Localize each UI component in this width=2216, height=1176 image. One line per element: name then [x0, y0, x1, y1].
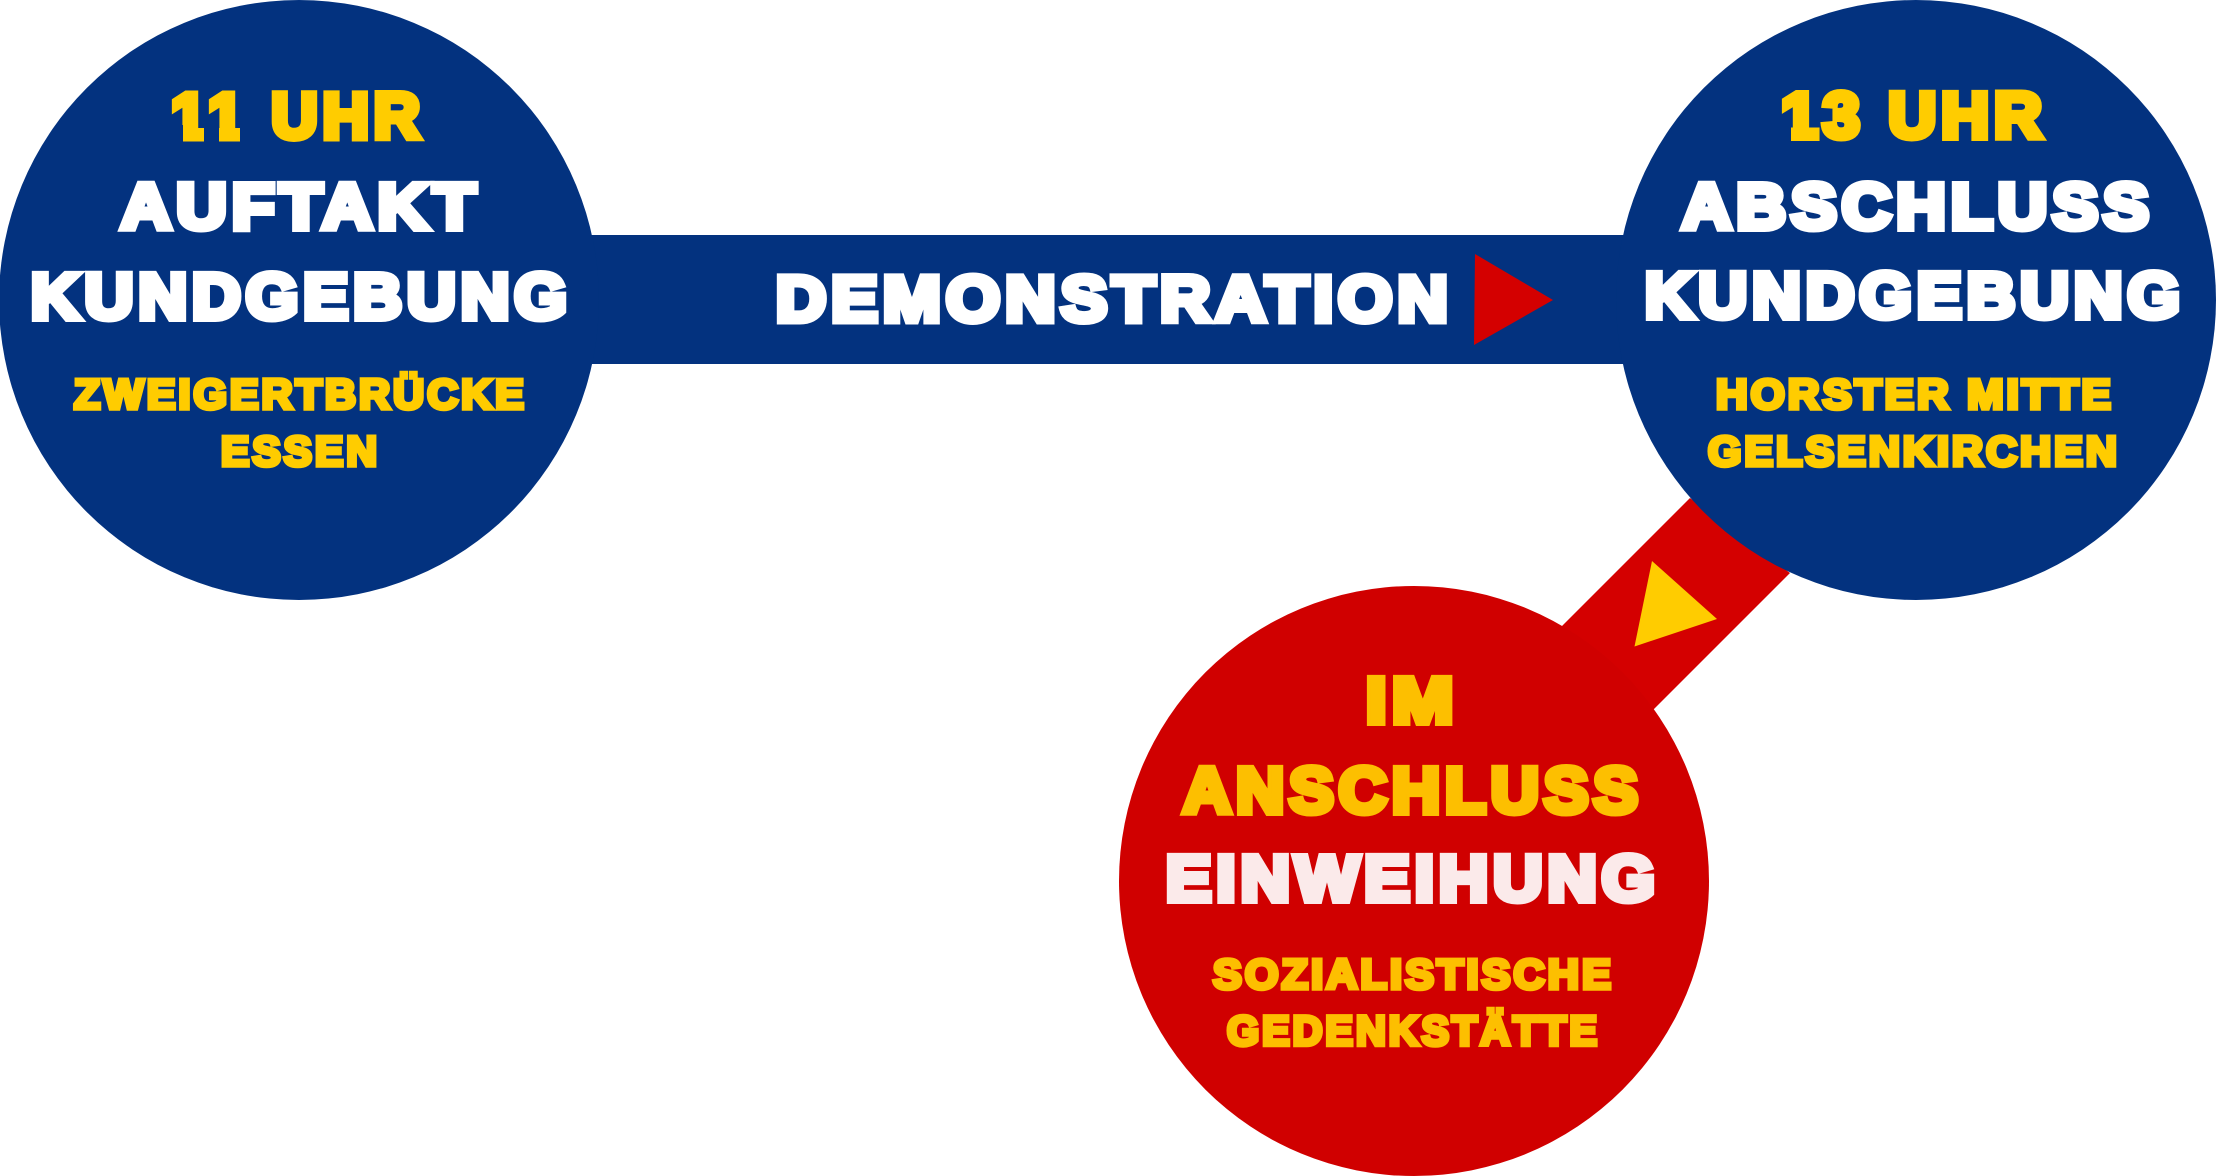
- location: SOZIALISTISCHE: SOZIALISTISCHE: [1213, 950, 1614, 998]
- arrow: red triangle: [1474, 254, 1553, 345]
- heading: AUFTAKT: AUFTAKT: [121, 170, 481, 242]
- panel: follow-up circle: [1119, 586, 1709, 1176]
- location: ZWEIGERTBRÜCKE: ZWEIGERTBRÜCKE: [74, 370, 527, 418]
- arrow: yellow triangle: [1634, 561, 1717, 646]
- red connector band: [1561, 498, 1790, 710]
- panel: start circle: [0, 0, 599, 600]
- location: GEDENKSTÄTTE: GEDENKSTÄTTE: [1227, 1007, 1600, 1054]
- label: DEMONSTRATION: DEMONSTRATION: [776, 263, 1453, 335]
- heading: 11 UHR: 11 UHR: [171, 80, 425, 152]
- heading: ABSCHLUSS: ABSCHLUSS: [1682, 170, 2154, 242]
- panel: end circle: [1616, 0, 2216, 600]
- heading: IM: IM: [1366, 664, 1459, 736]
- location: GELSENKIRCHEN: GELSENKIRCHEN: [1708, 428, 2120, 474]
- heading: ANSCHLUSS: ANSCHLUSS: [1183, 754, 1643, 826]
- location: HORSTER MITTE: HORSTER MITTE: [1716, 370, 2114, 418]
- location: ESSEN: ESSEN: [221, 428, 380, 474]
- heading: KUNDGEBUNG: KUNDGEBUNG: [1645, 260, 2185, 332]
- heading: 13 UHR: 13 UHR: [1781, 80, 2047, 152]
- blue connector bar: demonstration route: [560, 235, 1660, 364]
- heading: KUNDGEBUNG: KUNDGEBUNG: [31, 260, 572, 332]
- heading: EINWEIHUNG: EINWEIHUNG: [1166, 842, 1660, 914]
